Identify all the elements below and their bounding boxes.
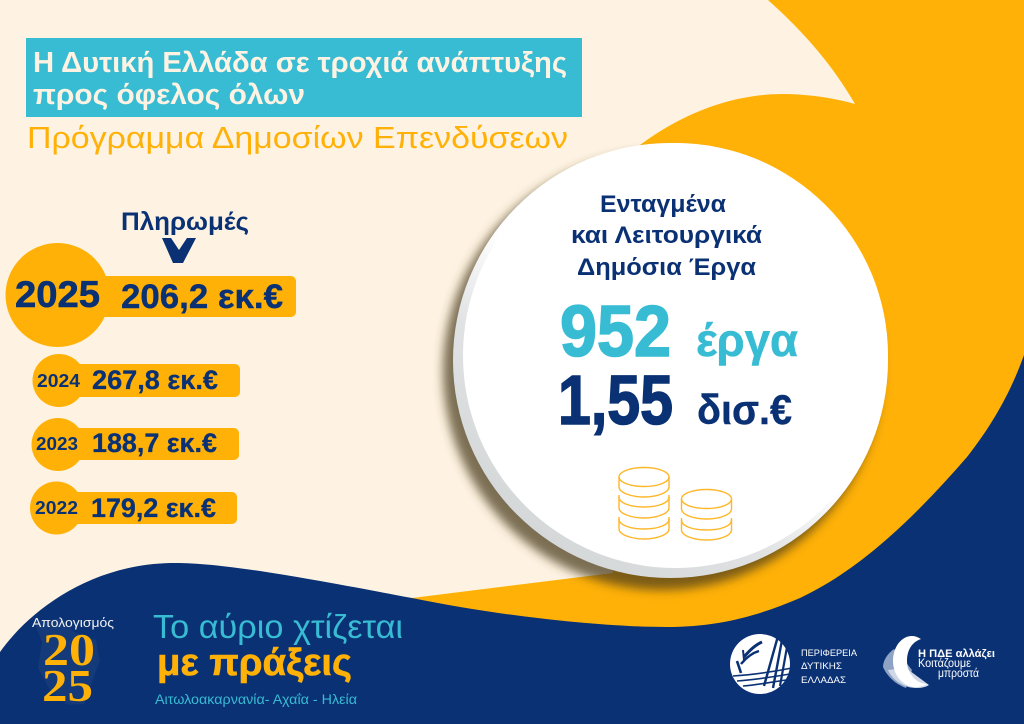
projects heading: Ενταγμένα <box>600 191 726 218</box>
circle shadow <box>443 152 881 590</box>
report 2025 badge: Απολογισμός <box>32 615 114 630</box>
payment 2023: 2023 <box>36 434 78 454</box>
logo text: region name: ΠΕΡΙΦΕΡΕΙΑ <box>801 648 858 659</box>
subtitle: Πρόγραμμα Δημοσίων Επενδύσεων <box>27 120 568 155</box>
logo: crescent with motto: Κοιτάζουμε <box>918 656 972 670</box>
navy wave <box>0 355 1024 724</box>
logo text: region name: ΔΥΤΙΚΗΣ <box>801 661 842 672</box>
payment 2022: 2022 <box>35 498 78 518</box>
payments heading with arrow: Πληρωμές <box>121 208 249 236</box>
stat: 952 projects: 952 <box>560 292 671 372</box>
payment 2022: 179,2 εκ.€ <box>91 493 216 523</box>
payment 2025: 206,2 εκ.€ <box>121 278 283 316</box>
payment 2022 <box>30 482 237 534</box>
title banner: προς όφελος όλων <box>33 79 305 111</box>
slogan <box>153 608 403 707</box>
projects heading: και Λειτουργικά <box>571 222 762 249</box>
slogan: με πράξεις <box>157 642 352 684</box>
title banner <box>26 38 582 117</box>
yellow wave <box>412 0 1024 650</box>
slogan: Το αύριο χτίζεται <box>153 608 403 645</box>
logo: crescent with motto <box>883 636 995 688</box>
payment 2024 <box>32 354 240 407</box>
stat: 1.55 billion <box>558 361 792 439</box>
payment 2024: 267,8 εκ.€ <box>92 365 218 395</box>
report 2025 badge <box>32 615 114 711</box>
projects heading: Δημόσια Έργα <box>577 254 756 281</box>
stat: 952 projects: έργα <box>696 314 798 366</box>
payment 2025: 2025 <box>15 274 100 315</box>
title banner: Η Δυτική Ελλάδα σε τροχιά ανάπτυξης <box>33 47 567 79</box>
logo: crescent with motto: Η ΠΔΕ αλλάζει <box>918 648 995 660</box>
icon: coin stacks <box>619 468 732 540</box>
slogan: Αιτωλοακαρνανία- Αχαΐα - Ηλεία <box>155 692 357 707</box>
payment 2023 <box>32 418 239 471</box>
panel: projects circle <box>453 143 888 578</box>
payment 2024: 2024 <box>37 371 80 391</box>
report 2025 badge: 25 <box>42 660 93 711</box>
logo: crescent with motto: μπροστά <box>938 666 979 680</box>
report 2025 badge: 20 <box>43 624 95 675</box>
stat: 952 projects <box>560 292 798 372</box>
payments heading with arrow <box>121 208 249 263</box>
stat: 1.55 billion: δισ.€ <box>697 386 792 433</box>
payment 2023: 188,7 εκ.€ <box>92 428 217 458</box>
projects heading <box>571 191 762 281</box>
logo: Region of Western Greece <box>730 634 792 694</box>
logo text: region name: ΕΛΛΑΔΑΣ <box>801 675 846 686</box>
logo text: region name <box>801 648 858 686</box>
stat: 1.55 billion: 1,55 <box>558 361 673 439</box>
payment 2025 <box>6 243 296 347</box>
